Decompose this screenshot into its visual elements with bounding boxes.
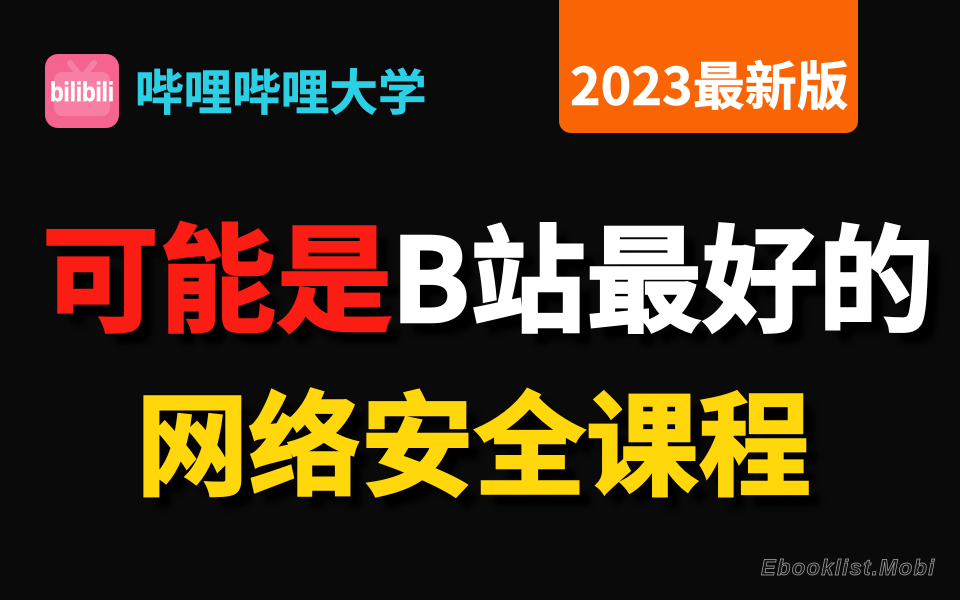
brand name: 哔哩哔哩大学 bbox=[135, 54, 427, 124]
badge: 2023 edition bbox=[559, 0, 858, 133]
logo: bilibili app icon bbox=[45, 54, 119, 128]
title line 2: 网络安全课程 bbox=[136, 356, 811, 519]
title: white: B站最好的 bbox=[391, 188, 934, 356]
watermark: Ebooklist.Mobi bbox=[761, 555, 936, 580]
badge text: 2023最新版 bbox=[570, 45, 849, 120]
title highlight: red: 可能是 bbox=[42, 186, 393, 356]
